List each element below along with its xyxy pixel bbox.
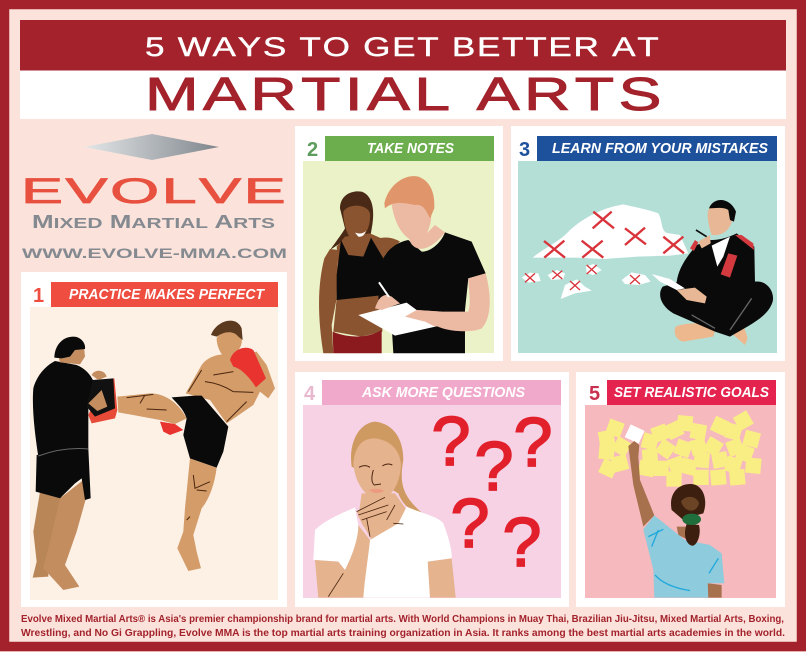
footer text [21, 614, 785, 639]
website: WWW.EVOLVE-MMA.COM [22, 245, 287, 261]
question marks: ? [503, 503, 541, 581]
logo wordmark: EVOLVE [21, 171, 288, 211]
question marks [432, 402, 552, 581]
panel 4: ask more questions [295, 372, 569, 607]
sticky notes [598, 410, 762, 487]
footer text: Wrestling, and No Gi Grappling, Evolve MMA is the top martial arts training organization in Asia. It ranks among the best martial arts academies in the world. [21, 628, 785, 639]
panel 3 header: 3 [519, 139, 530, 161]
question marks: ? [451, 484, 489, 562]
illustration: kick and pads [33, 321, 275, 590]
footer text: Evolve Mixed Martial Arts® is Asia's premier championship brand for martial arts. With World Champions in Muay Thai, Brazilian Jiu-Jitsu, Mixed Martial Arts, Boxing, [21, 614, 784, 625]
illustration: woman posting sticky notes [598, 410, 762, 598]
title [20, 20, 786, 120]
title: MARTIAL ARTS [145, 68, 666, 120]
panel 2 header: 2 [307, 139, 318, 161]
illustration: thinking woman [313, 422, 456, 598]
panel 2 header [307, 136, 494, 161]
icon: silver diamond [84, 134, 219, 160]
panel 1 header [33, 282, 278, 307]
panel 3: learn from your mistakes [511, 126, 785, 361]
question marks: ? [514, 403, 552, 481]
panel 5 header [589, 380, 776, 405]
panel 2: take notes [295, 126, 503, 361]
panel 2 header: TAKE NOTES [367, 141, 454, 157]
panel 4 header: 4 [304, 383, 316, 405]
question marks: ? [432, 402, 470, 480]
panel 1: practice makes perfect [21, 272, 287, 607]
panel 1 header: PRACTICE MAKES PERFECT [69, 287, 265, 303]
illustration: crossed-out papers and seated man [522, 200, 773, 345]
panel 3 header [519, 136, 777, 161]
panel 5: set realistic goals [576, 372, 785, 607]
logo: Evolve Mixed Martial Arts [21, 134, 288, 261]
panel 5 header: SET REALISTIC GOALS [614, 385, 769, 401]
illustration: couple taking notes [319, 176, 490, 353]
question marks: ? [475, 427, 513, 505]
panel 4 header: ASK MORE QUESTIONS [361, 385, 525, 401]
panel 4 header [304, 380, 561, 405]
title: 5 WAYS TO GET BETTER AT [145, 32, 660, 62]
panel 3 header: LEARN FROM YOUR MISTAKES [552, 141, 768, 157]
logo subtitle: M IXED M ARTIAL A RTS [32, 212, 275, 232]
panel 5 header: 5 [589, 383, 600, 405]
panel 1 header: 1 [33, 285, 44, 307]
